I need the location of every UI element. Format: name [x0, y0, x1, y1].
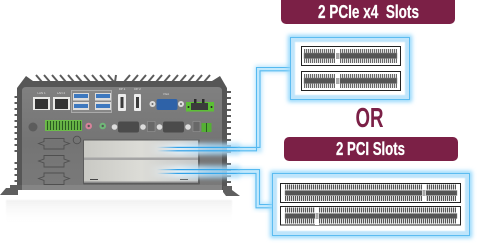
heading: 2 PCI Slots: 2 PCI Slots — [336, 138, 405, 159]
VGA port — [150, 92, 184, 110]
chassis body — [17, 76, 227, 190]
heading: 2 PCIe x4 Slots: 2 PCIe x4 Slots — [318, 1, 419, 22]
DIO terminal — [45, 120, 82, 131]
connector line: device to PCI slots — [238, 170, 273, 208]
bottom edge band — [22, 185, 222, 190]
PCIe slot 2 — [302, 72, 400, 90]
label: OR: OR — [356, 102, 384, 133]
mounting feet — [0, 185, 240, 196]
VGA port: VGA — [163, 92, 169, 96]
power connector — [186, 99, 214, 112]
DP ports: DP 2 — [134, 87, 141, 91]
PCI slot 1 — [280, 184, 460, 202]
PCI slot 2 — [280, 206, 460, 225]
COM ports — [112, 122, 200, 132]
connector line: device to PCIe slots — [238, 68, 291, 151]
panel: PCIe x4 slots — [290, 38, 410, 100]
DP ports — [118, 87, 141, 111]
DB9 knockouts — [38, 136, 81, 184]
USB ports — [72, 90, 112, 112]
light beams from slots — [148, 143, 240, 178]
chassis fins — [14, 75, 231, 182]
LAN ports: LAN 2 — [57, 91, 65, 95]
heading: 2 PCI Slots — [284, 137, 458, 161]
reflection under device — [6, 200, 232, 226]
panel: PCI slots — [272, 174, 470, 236]
expansion slot covers — [83, 140, 200, 184]
LAN ports: LAN 1 — [37, 91, 46, 95]
PCIe slot 1 — [302, 46, 400, 66]
DP ports: DP 1 — [119, 87, 126, 91]
power button — [28, 122, 38, 132]
LAN ports — [33, 91, 70, 110]
heading: 2 PCIe x4 Slots — [281, 0, 455, 24]
small green connector — [202, 123, 212, 132]
audio jacks — [85, 123, 106, 129]
device: rugged embedded PC — [0, 75, 240, 226]
